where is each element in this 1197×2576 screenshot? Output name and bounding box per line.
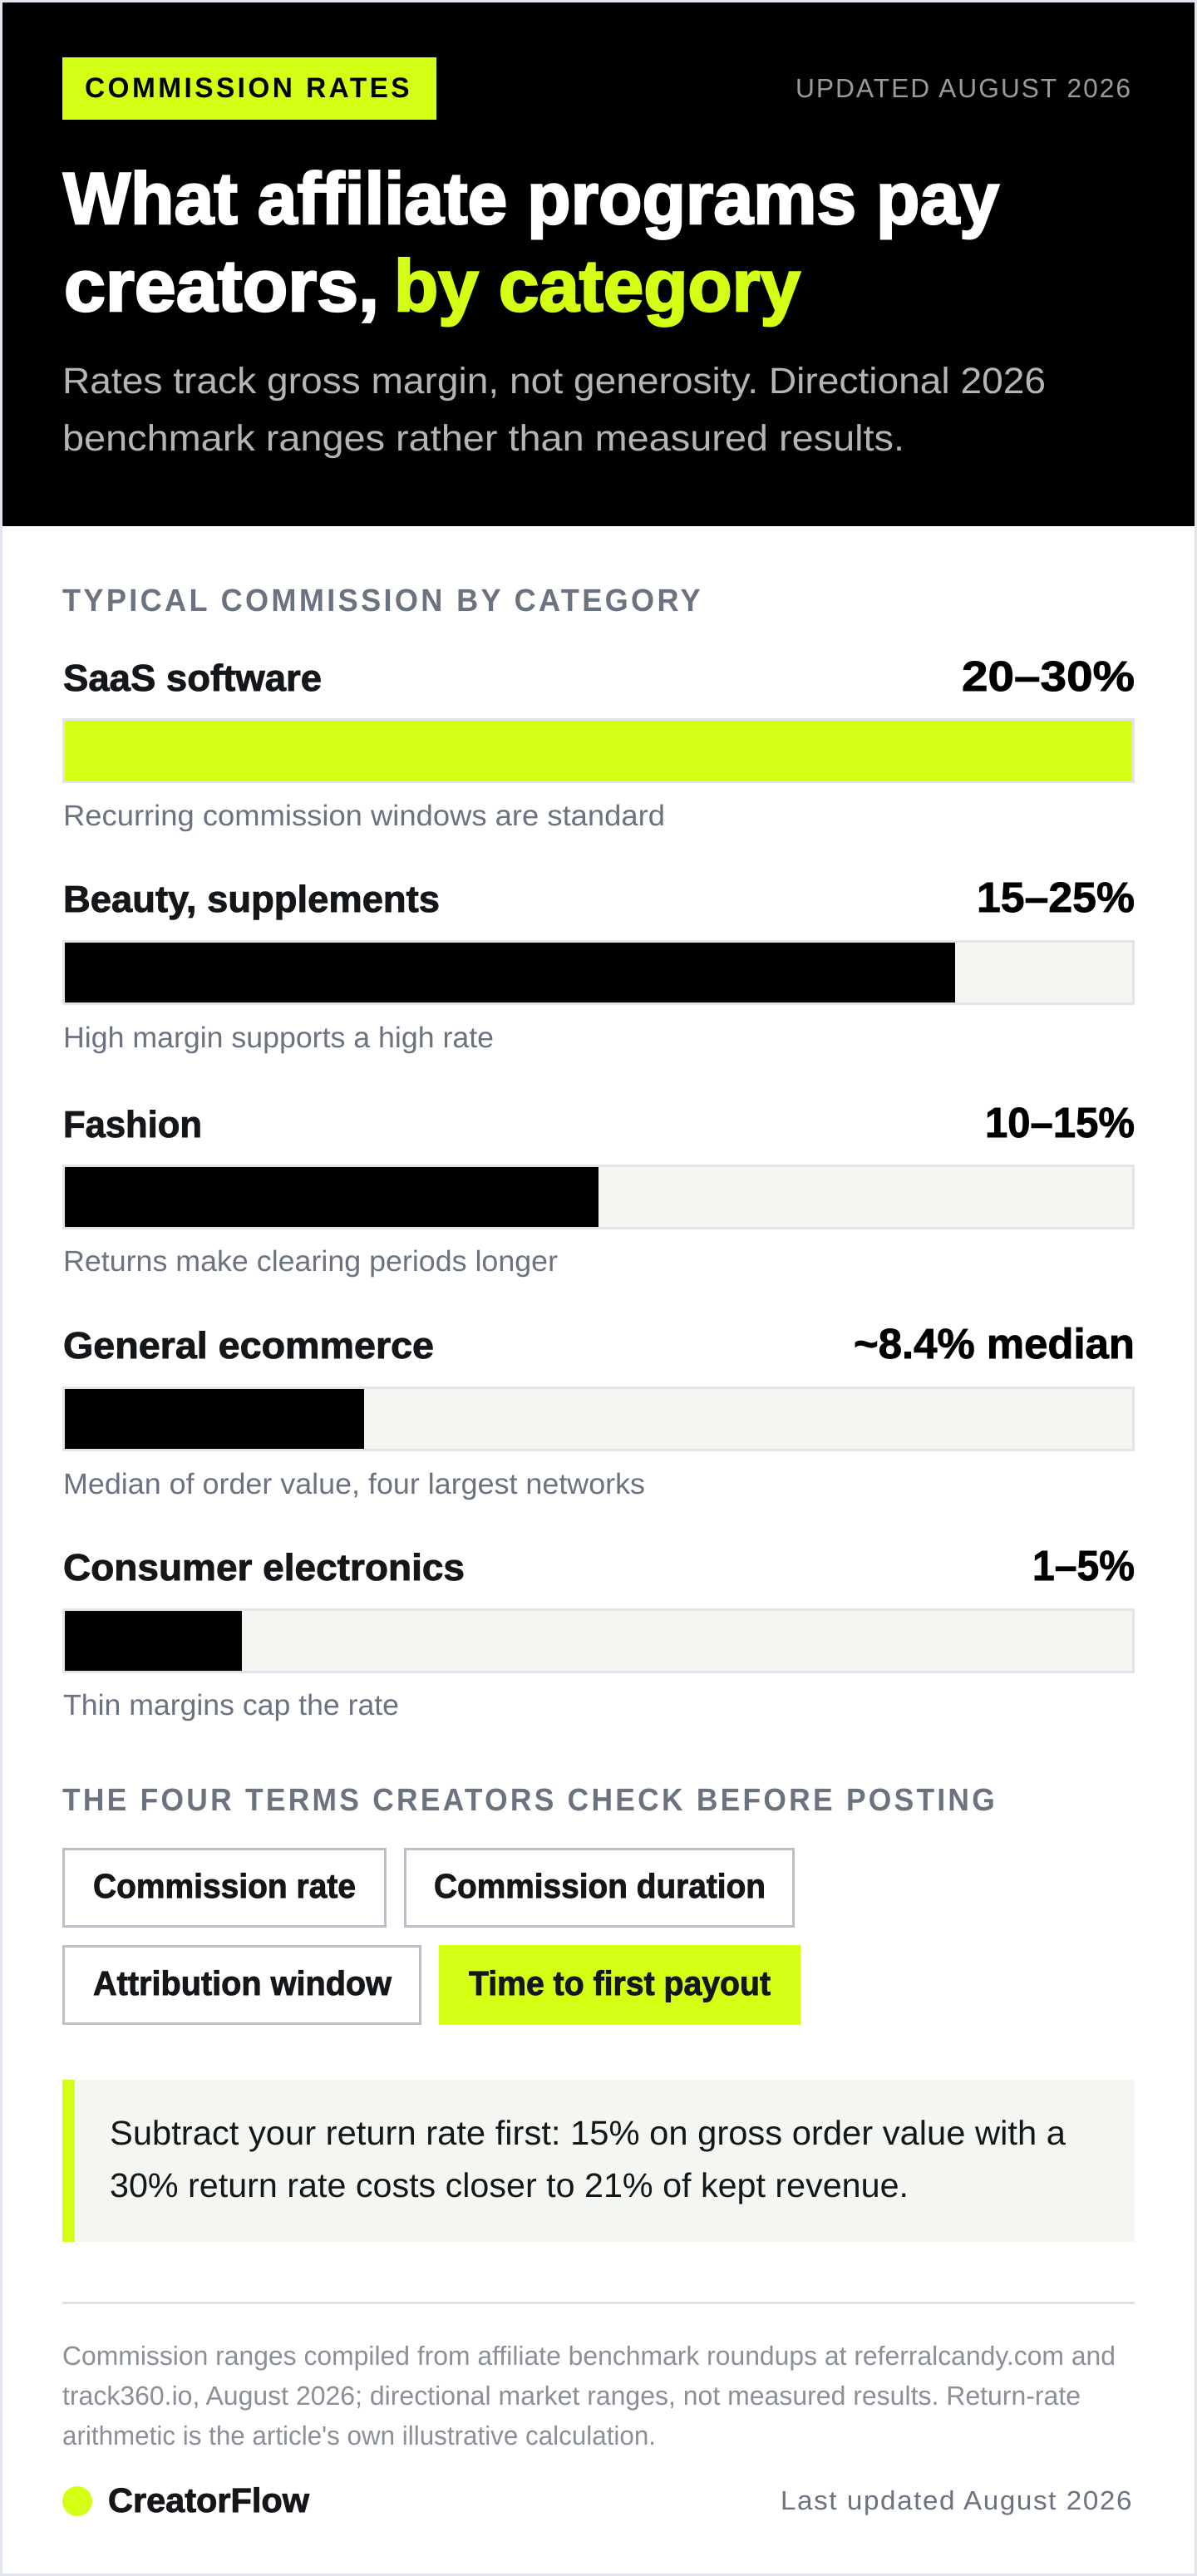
row: General ecommerce: General ecommerce xyxy=(63,1324,434,1367)
row: Fashion: 10–15% xyxy=(985,1099,1135,1146)
row: Consumer electronics: Consumer electronics xyxy=(63,1546,465,1588)
badge: commission rates: COMMISSION RATES xyxy=(85,72,412,104)
row: SaaS software xyxy=(62,653,1135,832)
bar chart: commission by category xyxy=(62,653,1135,1721)
chip: commission rate: Commission rate xyxy=(93,1867,356,1905)
row: General ecommerce: ~8.4% median xyxy=(854,1320,1135,1367)
row: General ecommerce: Median of order value, four largest networks xyxy=(63,1468,645,1500)
title: What affiliate programs pay xyxy=(63,157,999,239)
row: Fashion: Returns make clearing periods longer xyxy=(63,1245,558,1278)
footnote: sources xyxy=(62,2341,1116,2450)
updated date: UPDATED AUGUST 2026 xyxy=(796,73,1132,103)
chip: commission rate xyxy=(63,1849,386,1927)
callout: return rate: 30% return rate costs closer to 21% of kept revenue. xyxy=(110,2166,909,2204)
section heading: typical commission: TYPICAL COMMISSION BY CATEGORY xyxy=(62,584,703,618)
brand: CreatorFlow logo: CreatorFlow xyxy=(108,2481,309,2519)
chip: time to first payout: Time to first payout xyxy=(469,1964,771,2002)
chips: four terms xyxy=(63,1849,800,2025)
row: SaaS software: 20–30% xyxy=(962,653,1135,700)
row: Consumer electronics: 1–5% xyxy=(1032,1542,1135,1589)
row: SaaS software: SaaS software xyxy=(63,657,322,699)
chip: attribution window: Attribution window xyxy=(93,1964,392,2002)
row: Consumer electronics xyxy=(62,1542,1135,1721)
badge: commission rates xyxy=(62,57,436,120)
subtitle: benchmark ranges rather than measured results. xyxy=(62,418,904,459)
row: Fashion xyxy=(62,1099,1135,1278)
chip: time to first payout xyxy=(439,1945,800,2025)
callout: return rate xyxy=(62,2080,1135,2242)
chip: attribution window xyxy=(63,1947,421,2023)
title: creators, xyxy=(64,244,379,327)
panel: header xyxy=(2,2,1195,526)
footnote: sources: Commission ranges compiled from affiliate benchmark roundups at referralcandy.com and xyxy=(62,2341,1116,2371)
subtitle xyxy=(62,361,1046,459)
footnote: sources: track360.io, August 2026; directional market ranges, not measured results. Return-rate xyxy=(62,2381,1081,2411)
callout: return rate: Subtract your return rate first: 15% on gross order value with a xyxy=(110,2114,1066,2152)
row: Consumer electronics: Thin margins cap the rate xyxy=(63,1689,399,1721)
row: Beauty, supplements xyxy=(62,874,1135,1054)
footnote: sources: arithmetic is the article's own illustrative calculation. xyxy=(62,2421,656,2450)
row: Beauty, supplements: High margin supports a high rate xyxy=(63,1022,494,1054)
subtitle: Rates track gross margin, not generosity. Directional 2026 xyxy=(62,361,1046,401)
title: by category xyxy=(394,244,800,327)
section heading: four terms: THE FOUR TERMS CREATORS CHECK BEFORE POSTING xyxy=(62,1783,998,1818)
chip: commission duration xyxy=(406,1849,793,1927)
row: Beauty, supplements: 15–25% xyxy=(977,874,1135,921)
row: Fashion: Fashion xyxy=(63,1103,202,1145)
chip: commission duration: Commission duration xyxy=(434,1867,766,1905)
title xyxy=(63,157,999,327)
last updated: Last updated August 2026 xyxy=(781,2485,1133,2515)
row: Beauty, supplements: Beauty, supplements xyxy=(63,878,440,920)
row: General ecommerce xyxy=(62,1320,1135,1500)
row: SaaS software: Recurring commission windows are standard xyxy=(63,800,665,832)
